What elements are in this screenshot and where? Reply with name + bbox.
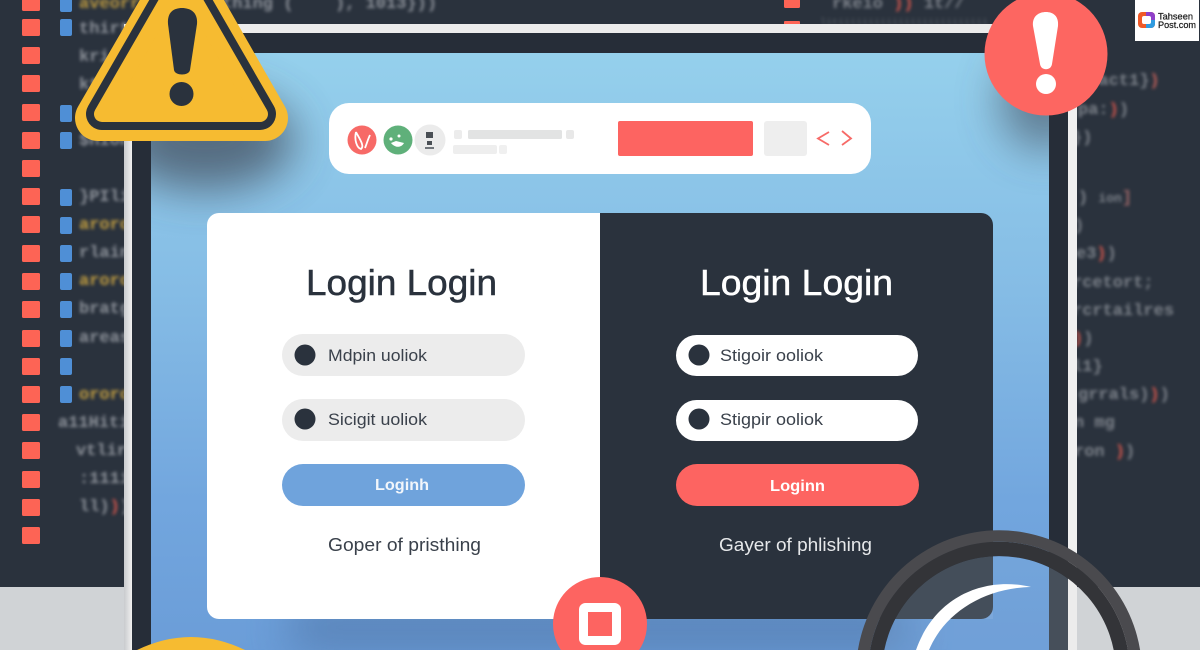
heading: light login: Login Login [306,262,497,303]
blurred code text: right column: n mg [1074,414,1115,433]
blurred code text: right column: rcrtailres [1072,302,1174,321]
blurred code text: top column: litiiiiiiiiiiiiiiiiiiiiiiiii [820,17,988,29]
blurred code text: left column: vtlir [76,442,127,461]
blurred code text: left column: kt [79,76,99,95]
input: first dark field [676,335,918,376]
login card: light panel [207,213,600,619]
left gutter: red line markers [22,0,40,544]
left gutter: blue line markers [60,0,72,403]
input: second dark field [676,400,918,441]
blurred code text: left column: $nion [79,132,130,151]
warning exclamation mark [168,8,197,106]
blurred code text: right column: ) ion] [1078,189,1132,208]
blurred code text: left column: }PIli [79,188,130,207]
blurred code text: right column: rract1}) [1078,72,1160,91]
logo text [1158,12,1196,31]
input: first dark field: Stigoir ooliok [720,347,824,365]
input: first light field [282,334,525,376]
blurred code text: right column: ) [1074,217,1084,236]
top gutter markers [784,0,800,27]
blurred code text: right column: grrals))) [1078,386,1170,405]
logo: Tahseen Post badge [1135,0,1199,41]
input: first light field: Mdpin uoliok [328,347,428,365]
blurred code text: left column: a11Hiti [58,414,129,433]
toolbar icon: red app [348,126,376,154]
laptop screen background [115,50,1090,650]
blurred code text: left column: areas [79,329,130,348]
input: second light field [282,399,525,441]
blurred code text: right column: l1} [1072,358,1103,377]
icon: red stop button [553,577,647,650]
icon: warning triangle [98,0,265,118]
blurred code text: left column [58,0,437,517]
blurred code text: right column [1072,72,1174,462]
heading: dark login: Login Login [700,262,893,303]
blurred code text: right column: pa:)) [1078,101,1129,120]
button: red login: Loginn [770,478,825,495]
button: red login [676,464,919,506]
toolbar gray button [764,121,807,156]
logo text: Post.com [1158,20,1196,31]
blurred code text: left column: kri [79,48,110,67]
blurred code text: left column: rlain [79,244,130,263]
icon: yellow blob at bottom left [137,637,245,650]
blurred code text: left column: ll))) [79,498,130,517]
logo text: Tahseen [1158,12,1193,22]
blurred code text: right column: e3)) [1076,245,1117,264]
toolbar icon: green app [384,126,412,154]
blurred code text: left column: aroro [79,272,130,291]
input: second light field: Sicigit uoliok [328,411,428,429]
blurred code text: right column: rcetort; [1072,274,1154,293]
blurred code text: left column: thirt [79,20,130,39]
blurred code text: right column: }) [1072,129,1092,148]
lens highlight [916,584,1031,650]
blurred code text: left column: ororo [79,386,130,405]
blurred code text: left column: :111i [79,470,130,489]
blurred code text: right column: ron )) [1074,443,1135,462]
blurred code text: right column: )) [1073,330,1093,349]
toolbar text placeholder bars [453,130,574,154]
logo icon [1138,12,1155,28]
caption: dark panel: Gayer of phlishing [719,535,872,555]
button: blue login [282,464,525,506]
input: second dark field: Stigpir ooliok [720,411,824,429]
icon: magnifying glass [858,520,1140,650]
toolbar red button [618,121,753,156]
toolbar panel [329,103,871,174]
login card: dark panel [600,213,993,619]
laptop frame [124,24,1077,650]
blurred code text: left column: bratg [79,300,130,319]
caption: light panel: Goper of pristhing [328,535,481,555]
button: blue login: Loginh [375,477,429,494]
desk strip [0,587,1200,650]
toolbar chevrons [818,131,851,145]
blurred code text: top column [820,0,988,29]
icon: red alert circle [984,0,1108,116]
toolbar icon: gray app [414,124,446,156]
blurred code text: left column: aroro [79,216,130,235]
